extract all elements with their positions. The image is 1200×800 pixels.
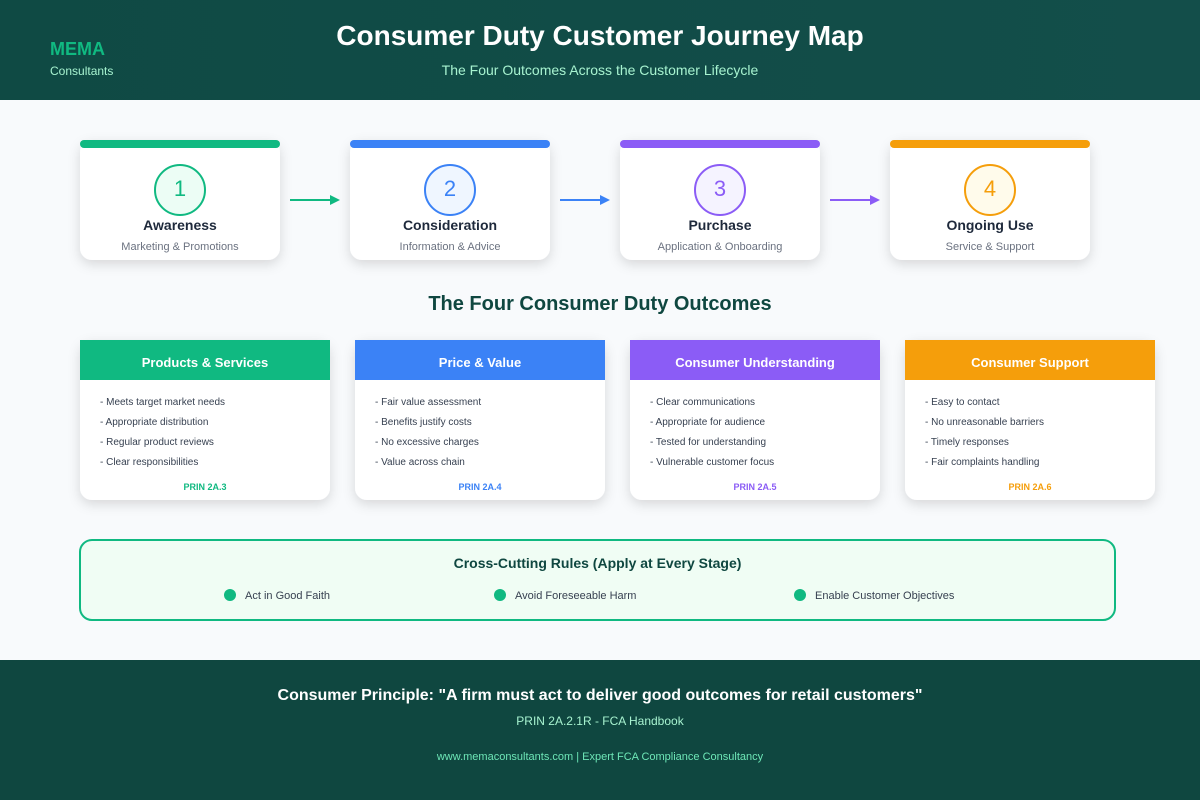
stage card: Purchase [620, 140, 820, 260]
outcome card: Products & Services: - Meets target market needs [100, 397, 225, 408]
subtitle: The Four Outcomes Across the Customer Lifecycle [442, 62, 759, 78]
stage card: Ongoing Use: 4 [984, 176, 996, 201]
stage card: Awareness [80, 140, 280, 260]
stage card: Ongoing Use: Ongoing Use [946, 217, 1034, 233]
panel: cross-cutting rules: Avoid Foreseeable Harm [515, 590, 636, 602]
outcome card: Price & Value: - Value across chain [375, 457, 465, 468]
panel: cross-cutting rules: Act in Good Faith [245, 590, 330, 602]
title: Consumer Duty Customer Journey Map [336, 20, 864, 51]
stage card: Consideration: 2 [444, 176, 456, 201]
outcome card: Products & Services: Products & Services [142, 355, 268, 370]
logo [50, 39, 113, 78]
outcome card: Price & Value: - Benefits justify costs [375, 417, 472, 428]
outcome card: Consumer Understanding: - Tested for understanding [650, 437, 766, 448]
outcome card: Products & Services: - Clear responsibilities [100, 457, 198, 468]
stage card: Awareness: Marketing & Promotions [121, 241, 239, 253]
stage card: Consideration [350, 140, 550, 260]
outcome card: Consumer Support: Consumer Support [971, 355, 1090, 370]
section heading: The Four Consumer Duty Outcomes [428, 293, 772, 315]
stage card: Purchase: Application & Onboarding [658, 241, 782, 253]
outcome card: Consumer Understanding: - Appropriate for audience [650, 417, 766, 428]
panel: cross-cutting rules [80, 540, 1115, 620]
outcome card: Consumer Understanding [630, 340, 880, 500]
logo: MEMA [50, 39, 105, 59]
stage card: Awareness: 1 [174, 176, 186, 201]
stage card: Awareness: Awareness [143, 217, 217, 233]
outcome card: Consumer Understanding: PRIN 2A.5 [733, 482, 777, 492]
outcome card: Consumer Support: - Fair complaints handling [925, 457, 1040, 468]
panel: cross-cutting rules: Cross-Cutting Rules (Apply at Every Stage) [454, 555, 741, 571]
stage card: Ongoing Use [890, 140, 1090, 260]
stage card: Ongoing Use: Service & Support [946, 241, 1034, 253]
outcome card: Consumer Understanding: - Clear communications [650, 397, 755, 408]
arrow: awareness to consideration [290, 195, 340, 205]
footer band: Consumer Principle: "A firm must act to deliver good outcomes for retail customers" [278, 687, 922, 704]
footer band [0, 660, 1200, 800]
footer band: PRIN 2A.2.1R - FCA Handbook [516, 714, 685, 728]
stage card: Consideration: Consideration [403, 217, 497, 233]
outcome card: Consumer Support [905, 340, 1155, 500]
outcome card: Price & Value: - Fair value assessment [375, 397, 481, 408]
outcome card: Consumer Support: PRIN 2A.6 [1008, 482, 1052, 492]
outcome card: Products & Services: - Appropriate distribution [100, 417, 208, 428]
outcome card: Price & Value: PRIN 2A.4 [458, 482, 502, 492]
outcome card: Consumer Understanding: Consumer Understanding [675, 355, 835, 370]
outcome card: Consumer Support: - Timely responses [925, 437, 1009, 448]
outcome card: Price & Value: Price & Value [439, 355, 521, 370]
stage card: Consideration: Information & Advice [400, 241, 500, 253]
footer band: www.memaconsultants.com | Expert FCA Compliance Consultancy [436, 751, 764, 763]
outcome card: Consumer Support: - No unreasonable barriers [925, 417, 1044, 428]
stage card: Purchase: 3 [714, 176, 726, 201]
outcome card: Products & Services: - Regular product reviews [100, 437, 214, 448]
outcome card: Consumer Understanding: - Vulnerable customer focus [650, 457, 774, 468]
outcome card: Price & Value [355, 340, 605, 500]
panel: cross-cutting rules: Enable Customer Objectives [815, 590, 955, 602]
stage card: Purchase: Purchase [688, 217, 752, 233]
outcome card: Products & Services [80, 340, 330, 500]
arrow: consideration to purchase [560, 195, 610, 205]
outcome card: Products & Services: PRIN 2A.3 [183, 482, 227, 492]
logo: Consultants [50, 64, 113, 78]
header band [0, 0, 1200, 100]
outcome card: Price & Value: - No excessive charges [375, 437, 479, 448]
arrow: purchase to ongoing use [830, 195, 880, 205]
outcome card: Consumer Support: - Easy to contact [925, 397, 1000, 408]
